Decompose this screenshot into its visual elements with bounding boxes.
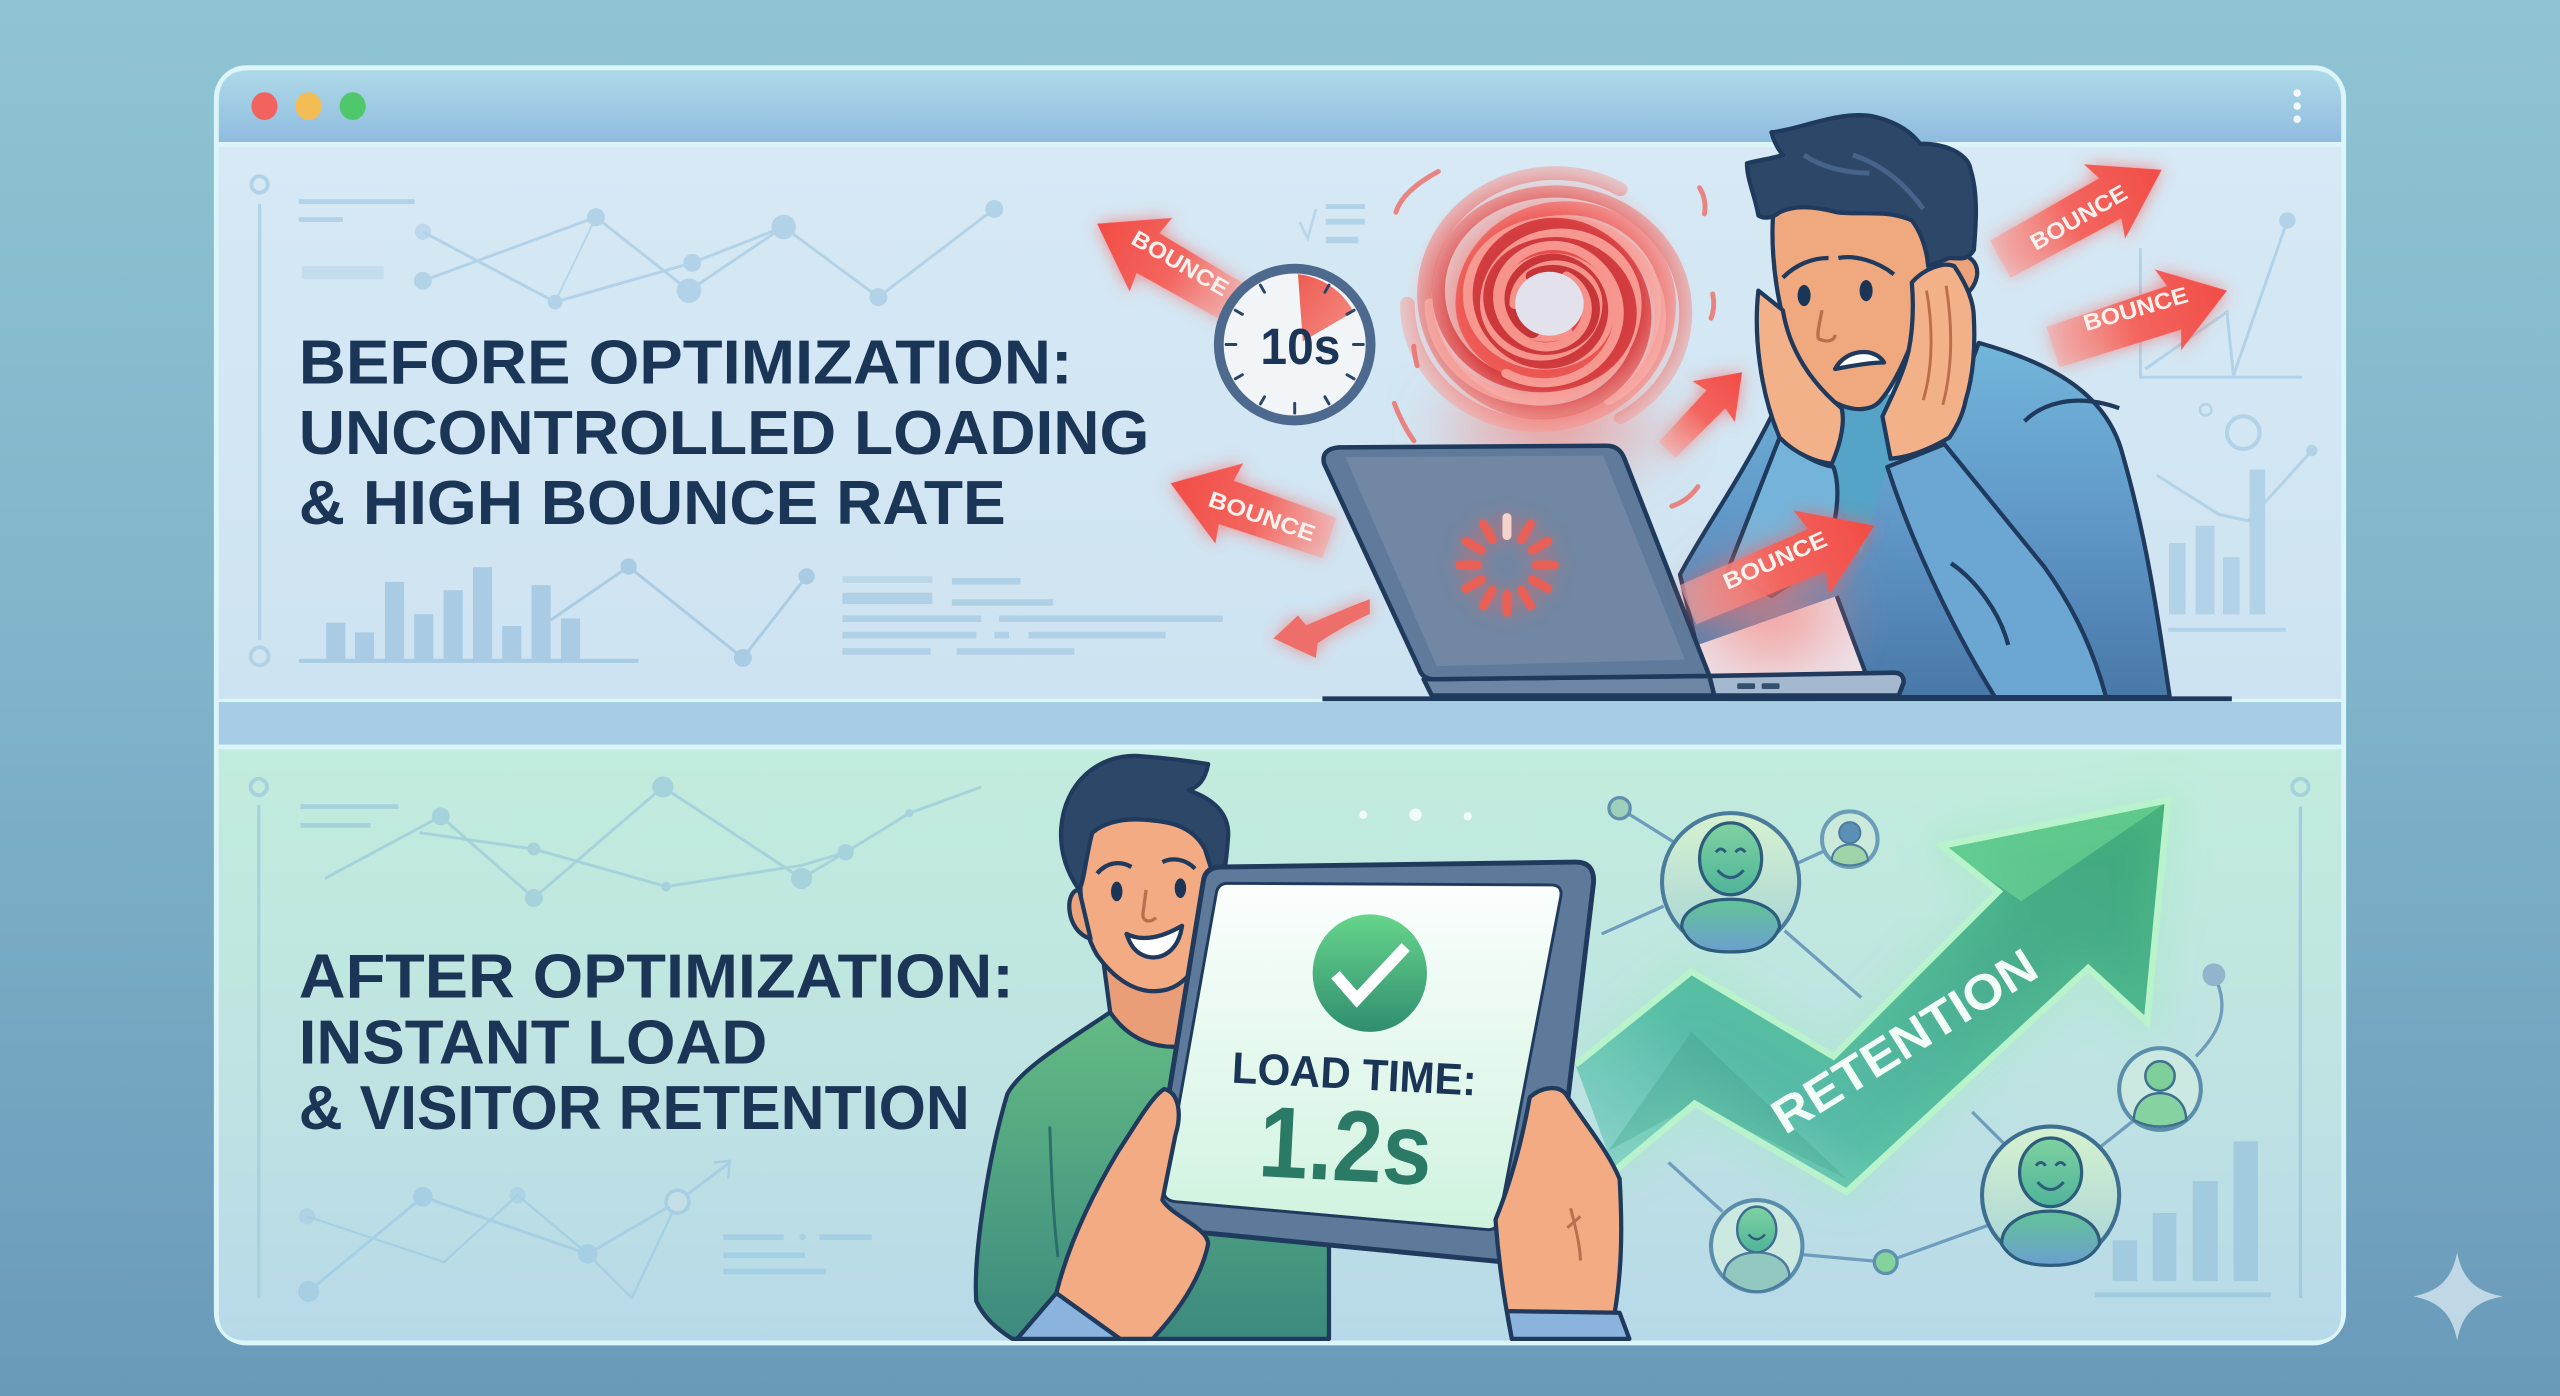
load time label: LOAD TIME: bbox=[1231, 1044, 1478, 1105]
background bar chart, lower left bbox=[299, 558, 815, 667]
arrow: bounce, upper left bbox=[1076, 187, 1260, 342]
icon: red vortex bbox=[1377, 129, 1734, 466]
green shirt bbox=[976, 1012, 1329, 1339]
arrow: bounce, lower left bbox=[1157, 443, 1343, 578]
avatar: small top bbox=[1822, 811, 1878, 867]
tablet: load time bbox=[1151, 862, 1594, 1265]
panel: before optimization bbox=[219, 115, 2341, 701]
arrow: bounce, right bbox=[2040, 250, 2240, 388]
background chart, upper right bbox=[1300, 204, 2318, 632]
icon: stopwatch 10s bbox=[1219, 269, 1371, 420]
retention label: RETENTION bbox=[1762, 939, 2047, 1145]
head bbox=[1080, 808, 1221, 991]
heading: after optimization bbox=[299, 943, 1014, 1143]
network nodes bbox=[1609, 798, 2225, 1274]
red glow behind laptop bbox=[1412, 354, 1690, 501]
left cuff bbox=[1017, 1293, 1120, 1339]
arrow: bounce, over laptop: BOUNCE bbox=[1719, 526, 1831, 595]
laptop screen bbox=[1324, 446, 1709, 679]
vortex outer wisps bbox=[1394, 171, 1714, 506]
ear bbox=[1928, 254, 1977, 307]
face bbox=[1772, 180, 1936, 409]
hair bbox=[1061, 756, 1228, 890]
browser window bbox=[214, 65, 2346, 1345]
right cuff bbox=[1507, 1311, 1629, 1339]
load time value: 1.2s bbox=[1256, 1085, 1435, 1207]
arrow: small, rising beside vortex bbox=[1646, 352, 1763, 470]
face features bbox=[1097, 859, 1195, 957]
arrow: bounce, upper right: BOUNCE bbox=[2025, 179, 2132, 255]
background line charts and bars, upper left bbox=[251, 176, 1003, 665]
network connection lines bbox=[1602, 808, 2222, 1262]
tablet screen bbox=[1164, 883, 1561, 1230]
desk line bbox=[1322, 696, 2232, 701]
menu dots bbox=[2293, 89, 2301, 123]
heading: before optimization: BEFORE OPTIMIZATION: bbox=[299, 329, 1073, 398]
icon: stopwatch 10s: 10s bbox=[1260, 318, 1340, 375]
arrow: bounce, upper left: BOUNCE bbox=[1127, 225, 1233, 301]
arrow: small, left of laptop bbox=[1273, 599, 1370, 658]
heading: after optimization: AFTER OPTIMIZATION: bbox=[299, 943, 1014, 1012]
gap beside arm bbox=[1698, 596, 1866, 674]
keyboard base bbox=[1709, 673, 1904, 696]
icon: four-point sparkle bbox=[2413, 1252, 2503, 1340]
man: stressed, hands on face bbox=[1680, 115, 2170, 697]
window control dots bbox=[251, 92, 366, 120]
heading: before optimization: UNCONTROLLED LOADING bbox=[299, 399, 1149, 468]
arrow: bounce, right: BOUNCE bbox=[2080, 281, 2191, 336]
background bar chart, lower right bbox=[2095, 779, 2309, 1298]
heading: after optimization: INSTANT LOAD bbox=[299, 1009, 767, 1078]
facial features bbox=[1783, 257, 1894, 369]
red glow over sleeve bbox=[1673, 531, 1869, 694]
laptop bbox=[1324, 446, 1904, 696]
arrow: green retention growth bbox=[1576, 800, 2168, 1192]
loading spinner bbox=[1460, 518, 1554, 612]
right hand bbox=[1496, 1088, 1621, 1339]
heading: after optimization: & VISITOR RETENTION bbox=[299, 1074, 970, 1143]
heading: before optimization: & HIGH BOUNCE RATE bbox=[299, 469, 1006, 538]
arrow: bounce, upper right bbox=[1980, 133, 2182, 296]
arrow: bounce, over laptop bbox=[1670, 484, 1892, 647]
title bar bbox=[219, 70, 2341, 142]
avatar: large top bbox=[1662, 813, 1799, 952]
heading: before optimization bbox=[299, 329, 1149, 538]
divider band bbox=[219, 702, 2341, 745]
hair bbox=[1747, 115, 1976, 266]
neck shadow in collar bbox=[1832, 392, 1910, 555]
sweater torso bbox=[1680, 343, 2170, 697]
left hand bbox=[1056, 1089, 1208, 1339]
avatar: medium lower left bbox=[1711, 1200, 1802, 1292]
sweater right arm bbox=[1887, 444, 2106, 697]
left hand bbox=[1757, 291, 1843, 464]
icon: green check bbox=[1313, 914, 1427, 1032]
sweater left forearm bbox=[1727, 438, 1837, 596]
man: happy, holding tablet bbox=[976, 756, 1329, 1339]
avatar: large lower bbox=[1982, 1127, 2119, 1265]
avatar: medium right bbox=[2119, 1048, 2201, 1130]
panel: after optimization bbox=[219, 749, 2341, 1340]
background charts, lower left bbox=[298, 1161, 872, 1302]
arrow: bounce, lower left: BOUNCE bbox=[1205, 486, 1319, 546]
hands holding tablet bbox=[1017, 1088, 1629, 1339]
background text lines bbox=[842, 576, 1223, 655]
neck bbox=[1104, 963, 1216, 1047]
right hand bbox=[1882, 265, 1974, 459]
loading dots bbox=[1359, 809, 1472, 821]
background charts, upper left bbox=[251, 776, 981, 1298]
